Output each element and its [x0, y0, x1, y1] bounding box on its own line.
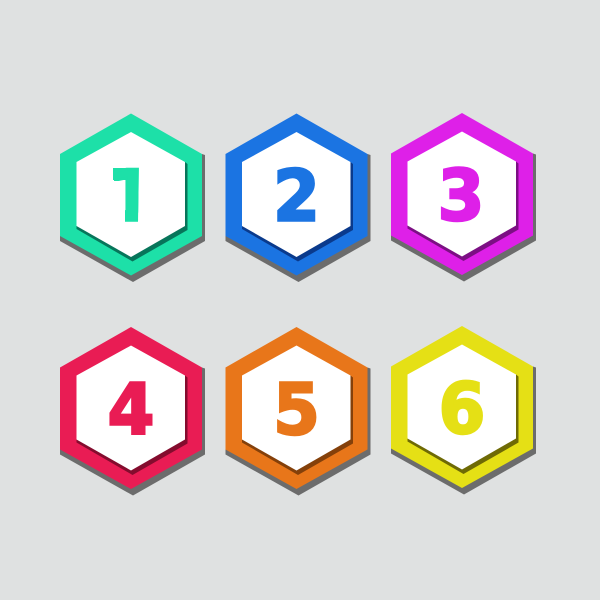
badge 3 [391, 113, 536, 282]
badge 2 [226, 114, 370, 282]
badge 1 [60, 114, 205, 282]
digit 6: 6 [439, 369, 485, 450]
badge 4 [60, 327, 205, 496]
badge 6 [391, 326, 536, 494]
digit 1: 1 [108, 156, 154, 238]
badge 5 [226, 327, 370, 496]
digit 4: 4 [108, 370, 154, 451]
digit 3: 3 [438, 156, 484, 237]
infographic: six numbered hexagon badges [60, 113, 536, 496]
digit 5: 5 [273, 370, 320, 451]
digit 2: 2 [273, 156, 320, 238]
